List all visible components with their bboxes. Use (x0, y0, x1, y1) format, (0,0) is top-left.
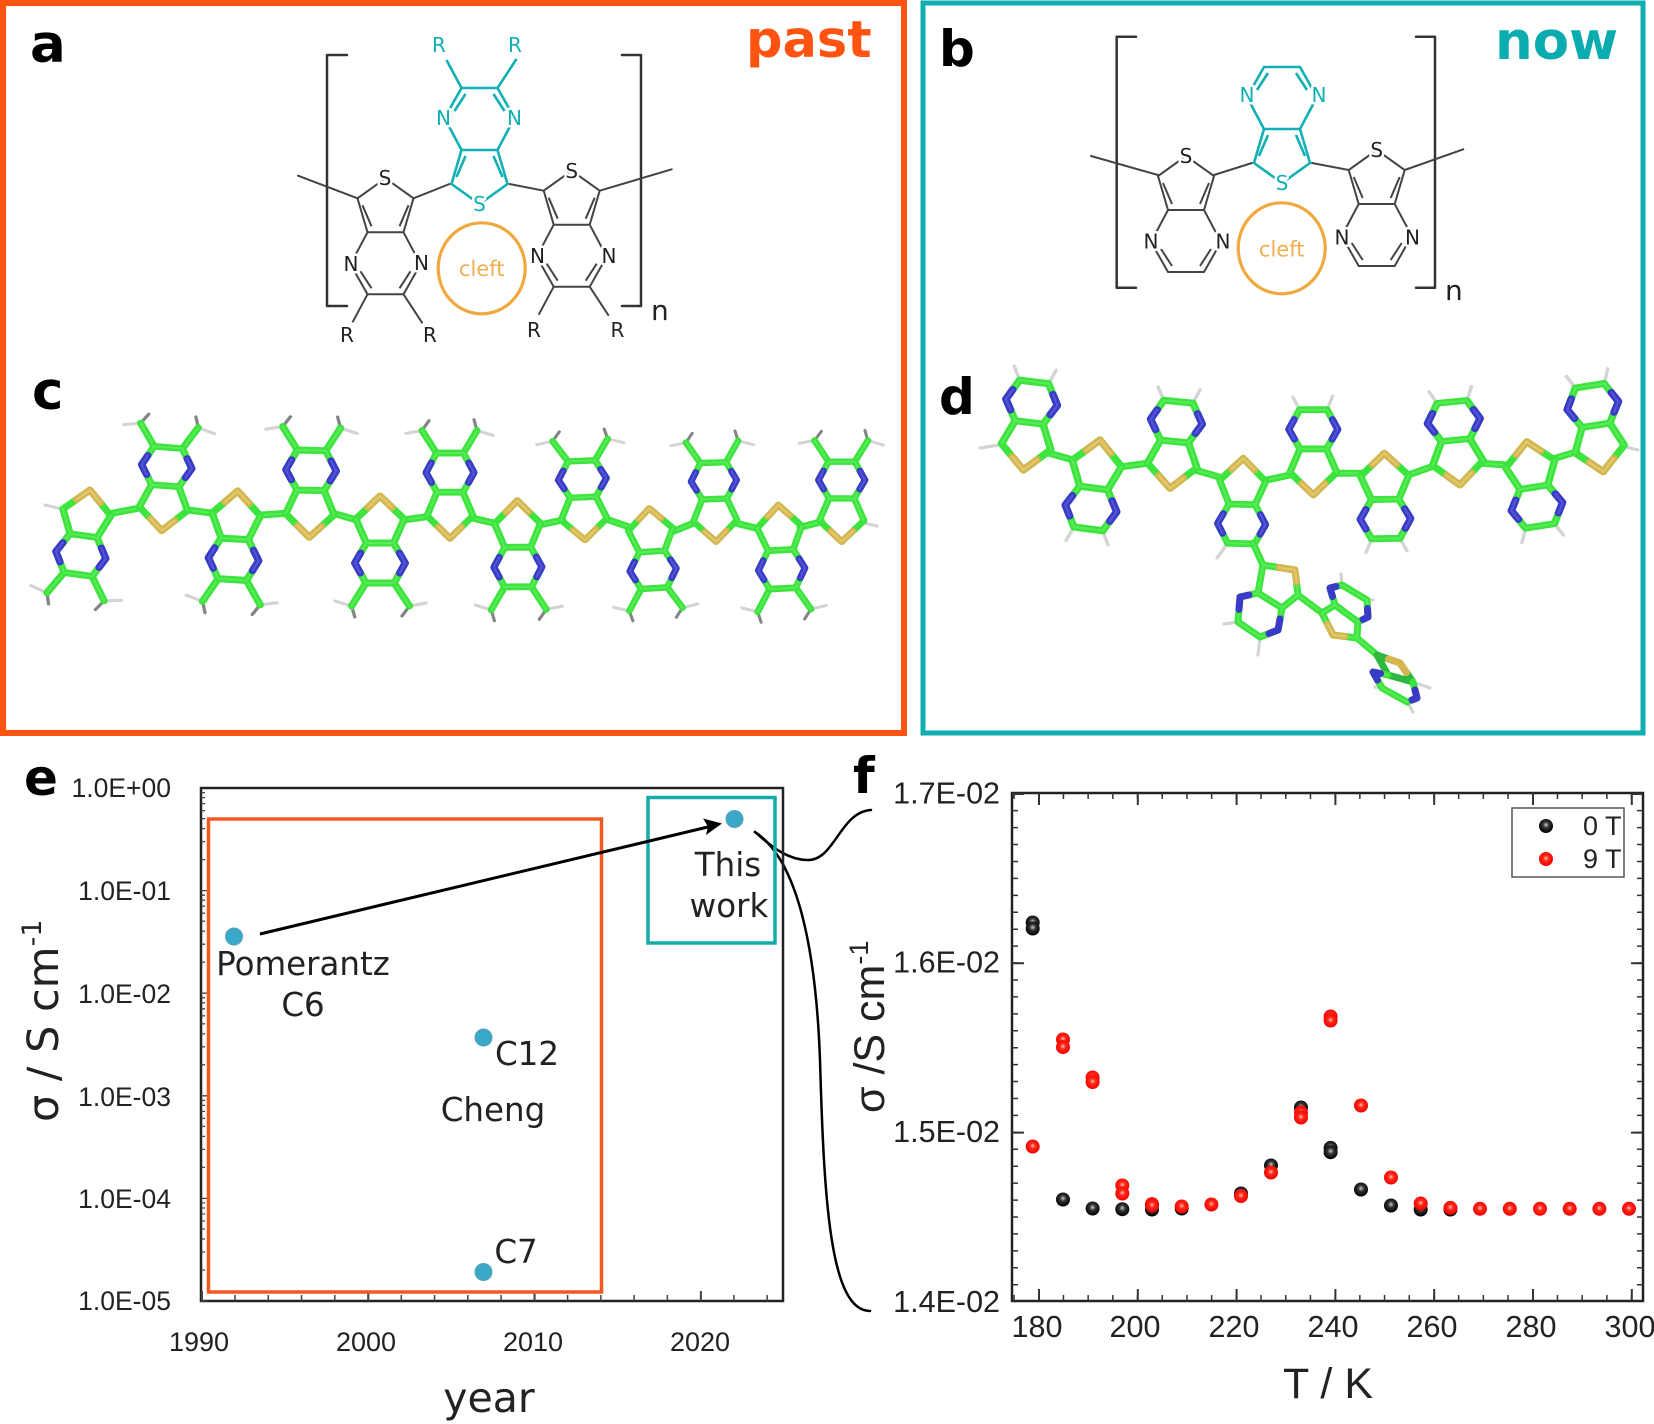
chart f: conductivity vs temperature (844, 776, 1654, 1408)
y axis title: -1 (17, 920, 48, 946)
heading past: past (746, 11, 872, 70)
label f: f (853, 747, 876, 805)
atom labels: R (432, 33, 446, 57)
y axis tick labels: 1.0E-03 (78, 1082, 171, 1112)
data points (226, 810, 743, 1280)
chemical structure a (298, 33, 672, 347)
axes frame (201, 788, 783, 1301)
0 T series (1026, 916, 1457, 1216)
terminal hydrogens c (45, 505, 877, 526)
central cyan monomer bonds (1247, 67, 1317, 183)
panel b: now polymer (923, 3, 1643, 733)
left monomer bonds (1151, 156, 1221, 272)
trend arrow (260, 818, 722, 934)
inter-ring linkers d (1049, 452, 1577, 480)
x axis tick labels: 280 (1506, 1310, 1556, 1344)
legend (1512, 808, 1624, 877)
data labels: C6 (281, 986, 325, 1024)
atom labels: N (530, 244, 545, 268)
central cyan monomer bonds (444, 59, 516, 204)
data labels (216, 846, 768, 1271)
x axis tick labels: 240 (1308, 1310, 1358, 1344)
atom labels: R (611, 318, 625, 342)
y axis tick labels: 1.0E-05 (78, 1286, 171, 1316)
atom labels: R (527, 318, 541, 342)
ticks (1013, 793, 1643, 1301)
label b: b (939, 20, 975, 78)
y axis title: σ /S cm (846, 965, 894, 1113)
atom labels: N (414, 251, 429, 275)
label e: e (24, 749, 58, 807)
atom labels: S (1370, 138, 1383, 162)
y axis tick labels (72, 773, 171, 1316)
x axis tick labels: 2010 (503, 1327, 563, 1357)
atom labels: N (1216, 230, 1230, 254)
inter-ring linkers c (112, 508, 822, 532)
x axis tick labels (169, 1327, 730, 1357)
backbone bonds (298, 169, 672, 198)
cleft circle (438, 223, 525, 314)
atom labels: N (507, 106, 522, 130)
3D molecule d (980, 365, 1638, 712)
y axis title: -1 (844, 941, 874, 965)
atom labels: S (379, 166, 391, 190)
atom labels: N (1144, 230, 1158, 254)
past region box (208, 819, 602, 1292)
x axis ticks (201, 1296, 783, 1298)
y axis tick labels: 1.7E-02 (893, 776, 1000, 810)
connector curves between charts (755, 810, 871, 1311)
terminal hydrogens d (980, 445, 1638, 712)
x axis tick labels: 2000 (336, 1327, 396, 1357)
y axis tick labels: 1.0E+00 (72, 773, 171, 803)
atom labels: N (344, 252, 358, 276)
data labels: This (694, 846, 761, 884)
data labels: work (690, 887, 768, 925)
x axis tick labels: 1990 (169, 1327, 229, 1357)
legend: 0 T (1583, 811, 1622, 841)
x axis tick labels: 260 (1407, 1310, 1457, 1344)
atom labels: R (423, 323, 437, 347)
x axis tick labels: 180 (1012, 1310, 1062, 1344)
atom labels: S (1180, 144, 1192, 168)
atom labels: N (602, 244, 616, 268)
data labels: C12 (495, 1035, 559, 1073)
y axis tick labels: 1.4E-02 (893, 1285, 1000, 1319)
atom labels: N (1312, 83, 1326, 107)
left monomer bonds (350, 178, 422, 323)
right monomer bonds (537, 171, 609, 316)
atom labels: N (436, 106, 451, 130)
y axis ticks (201, 793, 208, 1301)
panel a frame (3, 3, 904, 733)
repeat index n: n (651, 294, 669, 327)
cleft label: cleft (459, 257, 504, 281)
polymer brackets (1117, 37, 1435, 288)
polymer brackets (327, 55, 641, 306)
panel b frame (923, 3, 1643, 733)
atom labels: S (1276, 171, 1288, 195)
cleft label: cleft (1259, 238, 1304, 262)
y axis tick labels: 1.5E-02 (893, 1115, 1000, 1149)
y axis title: σ / S cm (19, 946, 69, 1122)
chemical structure b (1091, 37, 1463, 307)
heading now: now (1495, 11, 1618, 72)
y axis tick labels (893, 776, 1000, 1319)
cleft circle (1238, 203, 1325, 294)
atom labels: N (1240, 83, 1254, 107)
atom labels: R (340, 323, 354, 347)
atom labels (340, 33, 625, 347)
y axis tick labels: 1.0E-01 (78, 876, 171, 906)
x axis tick labels: 200 (1110, 1310, 1160, 1344)
x axis tick labels (1012, 1310, 1654, 1344)
data labels: Cheng (441, 1091, 545, 1129)
atom labels: S (473, 192, 486, 216)
3D molecule c (29, 411, 883, 623)
right monomer bonds (1342, 150, 1412, 266)
branched chain (1238, 543, 1417, 702)
atom labels (1144, 83, 1420, 254)
atom labels: N (1335, 226, 1349, 250)
backbone bonds (1091, 149, 1463, 175)
label d: d (939, 368, 975, 426)
label c: c (32, 361, 63, 422)
data labels: C7 (494, 1233, 538, 1271)
now region box (648, 798, 775, 943)
axes frame (1012, 793, 1643, 1301)
data labels: Pomerantz (216, 945, 390, 983)
x axis title: year (443, 1374, 535, 1422)
chart e: conductivity vs year (17, 773, 783, 1422)
y axis tick labels: 1.0E-02 (78, 979, 171, 1009)
repeat index n: n (1445, 274, 1463, 307)
x axis tick labels: 2020 (670, 1327, 730, 1357)
label a: a (30, 14, 66, 75)
y axis tick labels: 1.6E-02 (893, 946, 1000, 980)
x axis title: T / K (1283, 1360, 1373, 1408)
y axis tick labels: 1.0E-04 (78, 1184, 171, 1214)
atom labels: N (1405, 226, 1420, 250)
atom labels: R (508, 33, 522, 57)
legend: 9 T (1583, 844, 1622, 874)
x axis tick labels: 300 (1605, 1310, 1654, 1344)
panel a: past polymer (3, 3, 904, 733)
atom labels: S (565, 159, 578, 183)
x axis tick labels: 220 (1209, 1310, 1259, 1344)
9 T series (1026, 1010, 1636, 1216)
